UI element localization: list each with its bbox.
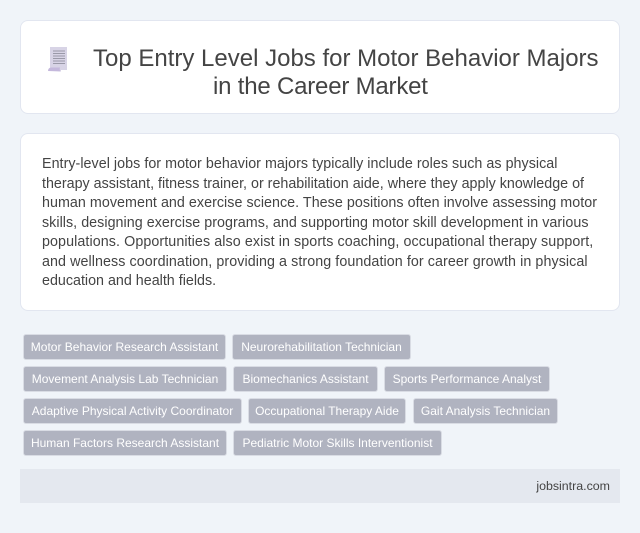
description text: therapy assistant, fitness trainer, or rehabilitation aide, where they apply knowledge of — [42, 176, 584, 192]
panel: title card — [20, 20, 620, 114]
icon: document scroll — [48, 47, 67, 72]
title — [93, 45, 599, 100]
tag — [232, 334, 411, 360]
description text: skills, designing exercise programs, and supporting motor skill development in various — [42, 214, 589, 230]
description text: Entry-level jobs for motor behavior majors typically include roles such as physical — [42, 156, 558, 172]
text: Top Entry Level Jobs for Motor Behavior Majors — [93, 45, 599, 72]
tag: Occupational Therapy Aide — [255, 404, 399, 418]
tag — [233, 430, 442, 456]
tag: Movement Analysis Lab Technician — [32, 372, 218, 386]
tag: Gait Analysis Technician — [421, 404, 550, 418]
tag: Pediatric Motor Skills Interventionist — [242, 436, 433, 450]
tag: Sports Performance Analyst — [393, 372, 541, 386]
tag: Neurorehabilitation Technician — [241, 340, 402, 354]
tag — [233, 366, 378, 392]
footer text: jobsintra.com — [536, 479, 610, 493]
tag: Biomechanics Assistant — [242, 372, 369, 386]
tag — [248, 398, 406, 424]
tag: Motor Behavior Research Assistant — [31, 340, 218, 354]
description text: populations. Opportunities also exist in sports coaching, occupational therapy support, — [42, 234, 593, 250]
tag — [23, 334, 226, 360]
tag — [384, 366, 550, 392]
text: in the Career Market — [213, 73, 428, 100]
panel: description card — [20, 133, 620, 311]
tag — [23, 398, 242, 424]
tag: Adaptive Physical Activity Coordinator — [32, 404, 233, 418]
tag — [23, 430, 227, 456]
footer bar — [20, 469, 620, 503]
tag: Human Factors Research Assistant — [31, 436, 219, 450]
job tags — [23, 334, 558, 456]
description text: education and health fields. — [42, 273, 216, 289]
description text: and wellness coordination, providing a strong foundation for career growth in physical — [42, 254, 588, 270]
description text: human movement and exercise science. These positions often involve assessing motor — [42, 195, 597, 211]
tag — [23, 366, 227, 392]
tag — [413, 398, 558, 424]
description text — [42, 156, 597, 289]
